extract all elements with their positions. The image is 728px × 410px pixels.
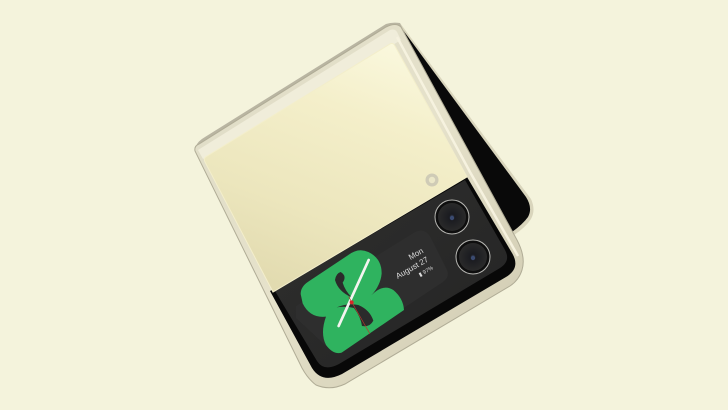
dark petals: [335, 272, 373, 326]
date text: Mon: [407, 246, 425, 262]
screen area: [296, 230, 448, 350]
phone: [195, 23, 534, 388]
clock hands: [339, 260, 369, 326]
black lower panel: [270, 177, 515, 378]
flash: [426, 174, 438, 186]
clock widget: [301, 250, 404, 353]
cream glass panel: [204, 43, 467, 292]
camera lens top: [435, 200, 469, 234]
right frame highlight: [397, 37, 518, 256]
phone frame: [195, 24, 523, 388]
hinge band: [198, 30, 401, 159]
hinge top edge: [196, 23, 408, 160]
date text: [389, 246, 435, 289]
back flap: [400, 23, 534, 235]
green shape: [301, 250, 404, 353]
date text: August 27: [394, 255, 430, 281]
cover screen: [296, 230, 448, 353]
date text: ▮ 97%: [418, 265, 435, 278]
camera lens bottom: [456, 240, 490, 274]
